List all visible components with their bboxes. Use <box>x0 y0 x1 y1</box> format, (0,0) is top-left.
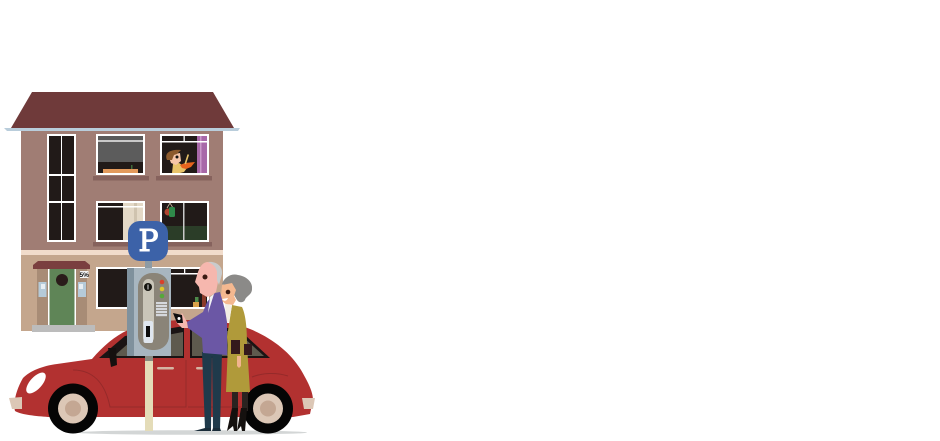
legs <box>232 391 238 411</box>
child <box>166 150 195 173</box>
pole <box>145 361 153 431</box>
buttons <box>156 302 167 316</box>
ground shadow <box>77 430 307 435</box>
bumpers <box>9 397 22 409</box>
upper wall <box>21 131 223 250</box>
coat <box>226 305 250 392</box>
jacket <box>187 292 227 355</box>
shirt <box>208 294 214 313</box>
parking sign: P <box>138 224 159 259</box>
head <box>195 262 220 297</box>
window with blind <box>96 134 145 175</box>
phone <box>173 313 183 323</box>
man <box>173 262 227 431</box>
legs <box>202 352 212 429</box>
lower sills <box>93 242 149 246</box>
clutch bag <box>231 340 252 355</box>
cactus pot <box>193 297 199 307</box>
rear side window <box>190 326 270 358</box>
door handles <box>157 367 174 370</box>
door lines <box>73 360 186 407</box>
roof <box>11 92 234 128</box>
meter panel <box>138 273 169 350</box>
status lights <box>160 280 164 298</box>
parking sign <box>128 221 168 261</box>
eye <box>202 274 208 280</box>
parking meter <box>127 221 171 431</box>
boots <box>227 408 247 431</box>
face <box>221 283 236 305</box>
house number: 5% <box>79 272 89 279</box>
door window <box>56 274 68 286</box>
doorstep <box>32 325 95 332</box>
doorway <box>33 261 90 325</box>
ground floor window <box>96 267 209 309</box>
front wheel <box>48 384 98 434</box>
knob <box>144 283 152 291</box>
window with child <box>160 134 209 175</box>
car <box>9 320 315 434</box>
upper sills <box>93 176 149 180</box>
woman <box>221 274 252 431</box>
car body <box>14 320 313 417</box>
meter body <box>127 268 171 356</box>
scarf <box>225 303 232 322</box>
window with plant <box>160 201 209 242</box>
window with curtain <box>96 201 145 242</box>
ground floor wall <box>21 255 223 331</box>
hand <box>176 313 188 328</box>
intercom left <box>38 282 46 297</box>
floor band <box>21 250 223 255</box>
tall window <box>47 134 76 242</box>
mirror <box>108 348 117 367</box>
hand <box>237 356 241 368</box>
rear wheel <box>243 384 293 434</box>
headlight <box>23 369 49 397</box>
hair <box>222 274 252 302</box>
hanging plant <box>164 203 175 217</box>
eave <box>4 128 240 131</box>
house <box>4 92 240 332</box>
card slot <box>144 321 153 343</box>
intercom right <box>78 282 86 297</box>
front side window <box>99 326 184 358</box>
hair <box>208 262 222 285</box>
shoes <box>194 428 221 431</box>
